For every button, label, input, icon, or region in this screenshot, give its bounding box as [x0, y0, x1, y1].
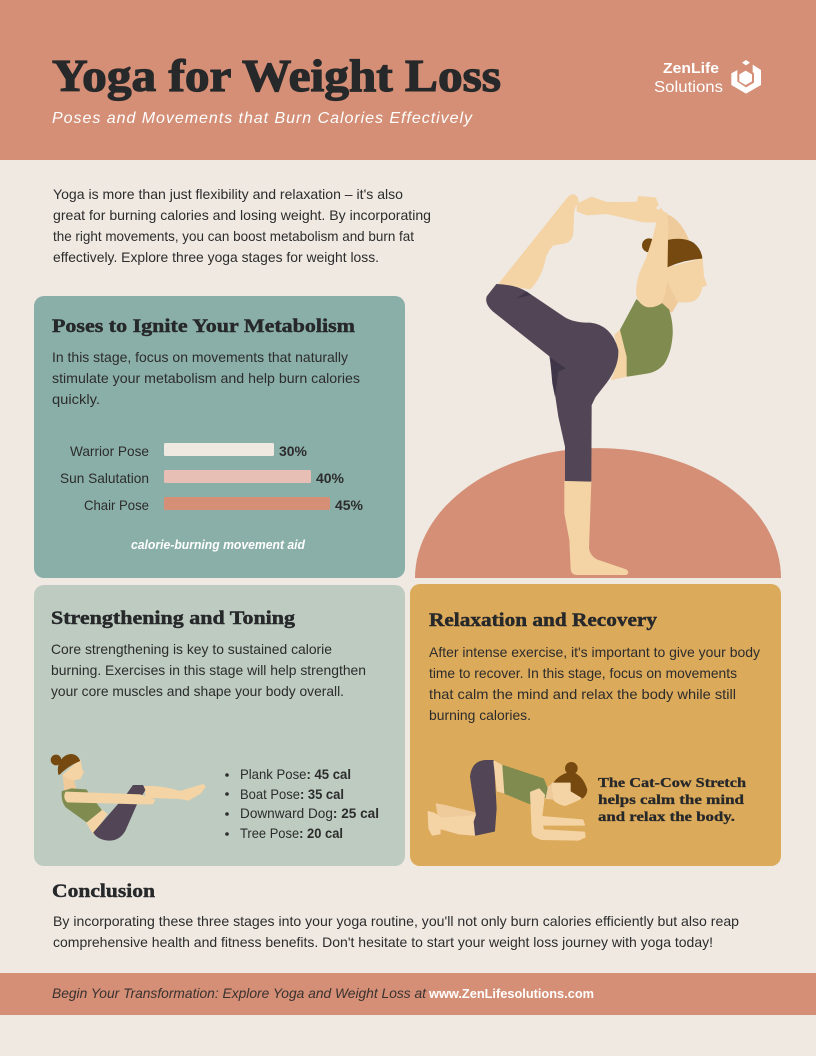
conclusion text: By incorporating these three stages into your yoga routine, you'll not only burn calories efficiently but also reap: [53, 913, 739, 929]
intro text: Yoga is more than just flexibility and relaxation – it's also: [53, 186, 403, 202]
bar chart: Sun Salutation: [60, 470, 149, 486]
conclusion text: [53, 913, 739, 950]
footer banner: Begin Your Transformation: Explore Yoga and Weight Loss at: [52, 985, 427, 1001]
illustration: boat pose: [51, 755, 205, 840]
panel text: After intense exercise, it's important to give your body: [429, 644, 760, 660]
intro text: great for burning calories and losing weight. By incorporating: [53, 207, 431, 223]
bar chart: 40%: [316, 470, 345, 486]
subtitle: Poses and Movements that Burn Calories Effectively: [52, 110, 473, 127]
cat-cow caption: The Cat-Cow Stretch: [598, 776, 746, 791]
calorie list: Boat Pose: 35 cal: [240, 786, 344, 802]
panel text: quickly.: [52, 391, 100, 407]
calorie list: Plank Pose: 45 cal: [240, 766, 351, 782]
panel text: that calm the mind and relax the body while still: [429, 686, 736, 702]
logo: Solutions: [654, 79, 723, 96]
panel heading: Poses to Ignite Your Metabolism: [52, 316, 355, 337]
footer banner: [0, 973, 816, 1015]
conclusion heading: Conclusion: [52, 881, 155, 902]
panel text: In this stage, focus on movements that naturally: [52, 349, 348, 365]
header banner: [0, 0, 816, 160]
panel heading: Strengthening and Toning: [51, 608, 296, 629]
panel text: burning. Exercises in this stage will help strengthen: [51, 662, 366, 678]
conclusion text: comprehensive health and fitness benefits. Don't hesitate to start your weight loss journey with yoga today!: [53, 934, 713, 950]
logo: ZenLife: [663, 60, 719, 77]
title: Yoga for Weight Loss: [52, 51, 501, 101]
panel: relaxation and recovery: [410, 584, 781, 866]
panel text: time to recover. In this stage, focus on movements: [429, 665, 737, 681]
intro text: the right movements, you can boost metabolism and burn fat: [53, 228, 414, 244]
calorie list: Tree Pose: 20 cal: [240, 825, 343, 841]
bar chart: 30%: [279, 443, 308, 459]
intro text: [53, 186, 431, 265]
calorie list: [225, 766, 379, 841]
panel text: stimulate your metabolism and help burn calories: [52, 370, 360, 386]
panel text: Core strengthening is key to sustained calorie: [51, 641, 332, 657]
bar chart: [60, 443, 364, 513]
panel text: your core muscles and shape your body overall.: [51, 683, 344, 699]
panel: metabolism poses: [34, 296, 405, 578]
cat-cow caption: helps calm the mind: [598, 793, 744, 808]
cat-cow caption: [598, 776, 746, 825]
panel text: [429, 644, 760, 723]
illustration: dancer pose: [487, 195, 706, 574]
panel text: burning calories.: [429, 707, 531, 723]
bar chart: Warrior Pose: [70, 443, 149, 459]
panel text: [52, 349, 360, 407]
bar chart: Chair Pose: [84, 497, 149, 513]
bar chart: 45%: [335, 497, 364, 513]
panel: strengthening and toning: [34, 585, 405, 866]
panel text: [51, 641, 366, 699]
cat-cow caption: and relax the body.: [598, 810, 735, 825]
calorie list: Downward Dog: 25 cal: [240, 805, 379, 821]
panel heading: Relaxation and Recovery: [429, 610, 658, 631]
intro text: effectively. Explore three yoga stages for weight loss.: [53, 249, 379, 265]
illustration: cat-cow pose: [428, 761, 587, 840]
logo: [654, 60, 761, 96]
footer banner: www.ZenLifesolutions.com: [428, 986, 594, 1001]
semicircle backdrop: [415, 448, 781, 578]
chart caption: calorie-burning movement aid: [131, 538, 305, 552]
